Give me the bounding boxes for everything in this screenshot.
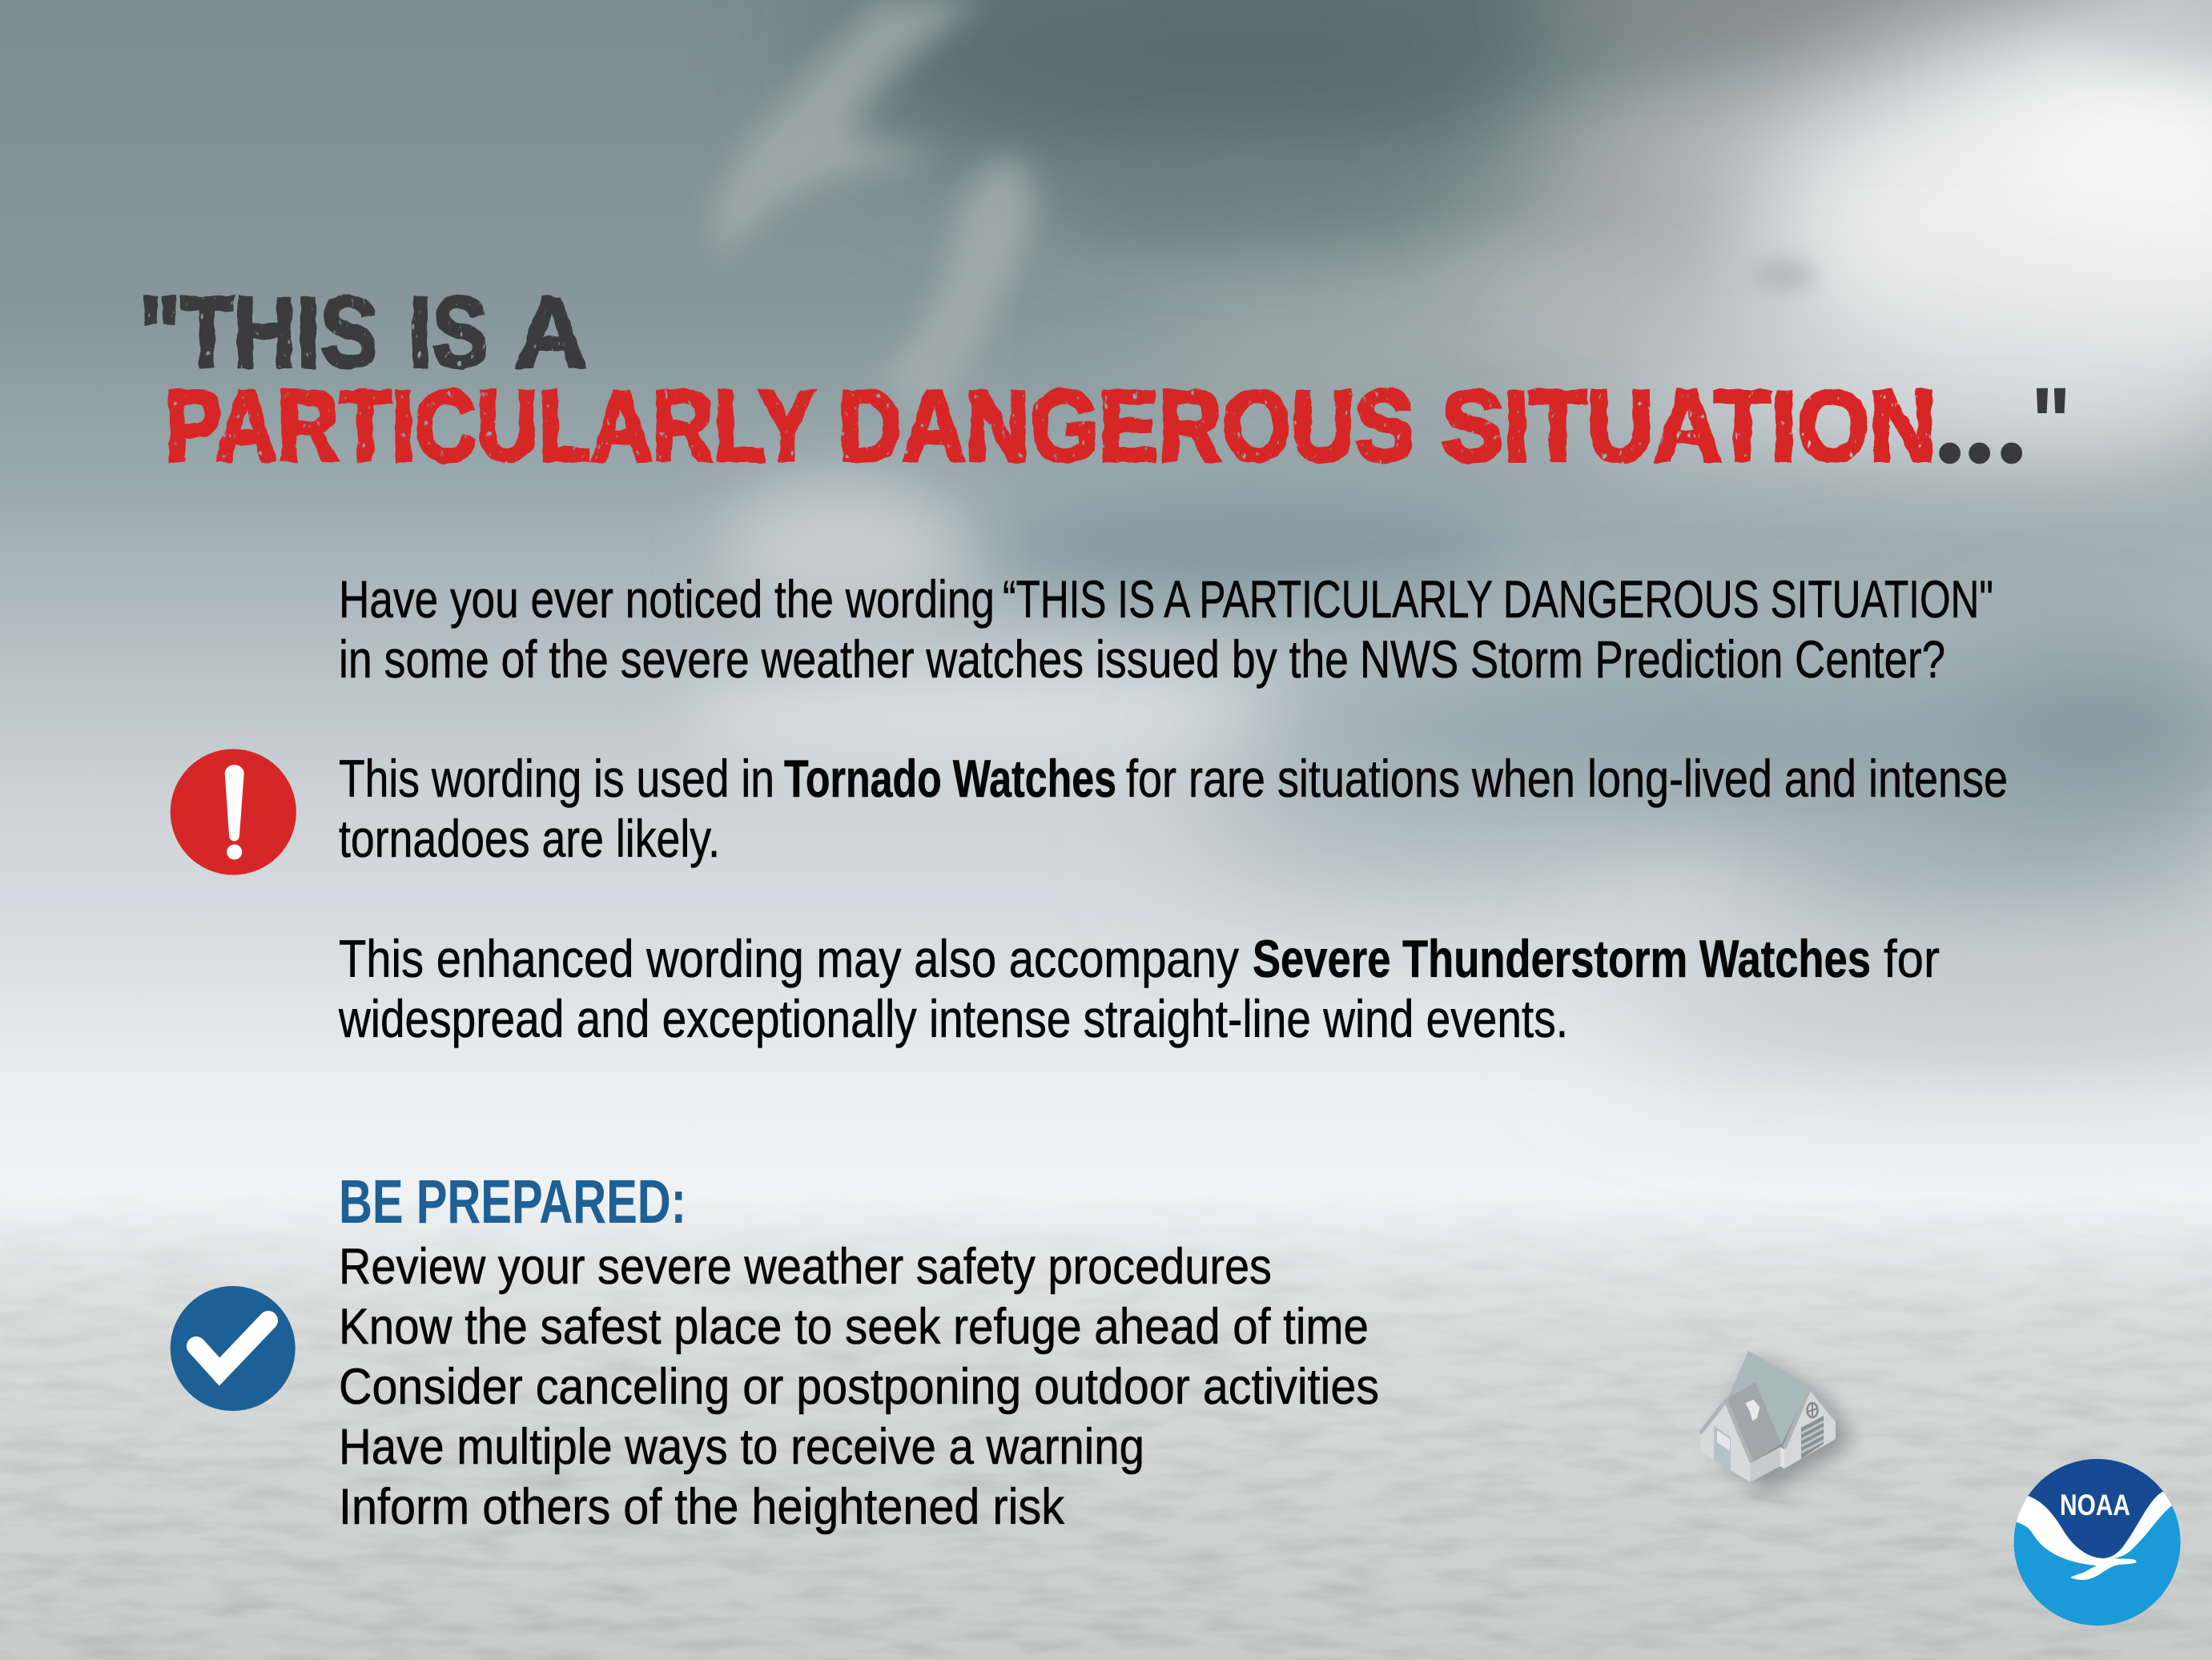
title [139,277,2071,491]
title line 2: red emphasis: DANGEROUS [838,371,1414,482]
paragraph: severe thunderstorm watches [338,929,1940,1048]
title ellipsis and closing quote: " [2031,368,2071,479]
paragraph: intro question: in some of the severe weather watches issued by the [339,629,1349,689]
list: preparedness actions: Know the safest place to seek refuge ahead of time [339,1299,1369,1355]
title line 2: red emphasis [165,371,1937,482]
title line 2: red emphasis: PARTICULARLY [165,371,815,482]
icon: isometric house [1700,1351,1848,1493]
list: preparedness actions: Inform others of the heightened risk [339,1479,1064,1535]
list: preparedness actions [339,1239,1379,1535]
title line 1: opening quote: A [515,277,587,388]
title ellipsis and closing quote [1933,344,2071,491]
paragraph: intro question: Have you ever noticed the wording [339,569,995,629]
title line 1: opening quote: IS [408,277,489,388]
title ellipsis and closing quote: ... [1933,344,2028,491]
list: preparedness actions: Have multiple ways to receive a warning [339,1419,1144,1475]
paragraph: tornado watches: This wording is used in [339,749,774,808]
paragraph: tornado watches: Tornado Watches [784,749,1116,808]
icon: check mark [171,1286,296,1411]
logo: NOAA [2013,1459,2181,1626]
list: preparedness actions: Review your severe weather safety procedures [339,1239,1272,1295]
title line 1: opening quote: "THIS [139,277,378,388]
heading: be prepared: BE PREPARED: [339,1168,686,1236]
icon: exclamation warning [171,749,296,875]
paragraph: severe thunderstorm watches: for [1884,929,1940,988]
list: preparedness actions: Consider canceling or postponing outdoor activities [339,1359,1379,1415]
paragraph: tornado watches: tornadoes are likely. [339,809,720,868]
paragraph: severe thunderstorm watches: Severe Thunderstorm Watches [1253,929,1871,988]
paragraph: severe thunderstorm watches: This enhanced wording may also accompany [339,929,1239,988]
logo: NOAA: NOAA [2060,1489,2130,1521]
paragraph: severe thunderstorm watches: widespread and exceptionally intense straight-line wind events. [338,989,1568,1048]
paragraph: tornado watches [339,749,2008,868]
paragraph: tornado watches: for rare situations when long-lived and intense [1126,749,2008,808]
title line 1: opening quote [139,277,587,388]
paragraph: intro question [339,569,1993,689]
title line 2: red emphasis: SITUATION [1442,371,1937,482]
paragraph: intro question: NWS Storm Prediction Center? [1360,629,1945,689]
